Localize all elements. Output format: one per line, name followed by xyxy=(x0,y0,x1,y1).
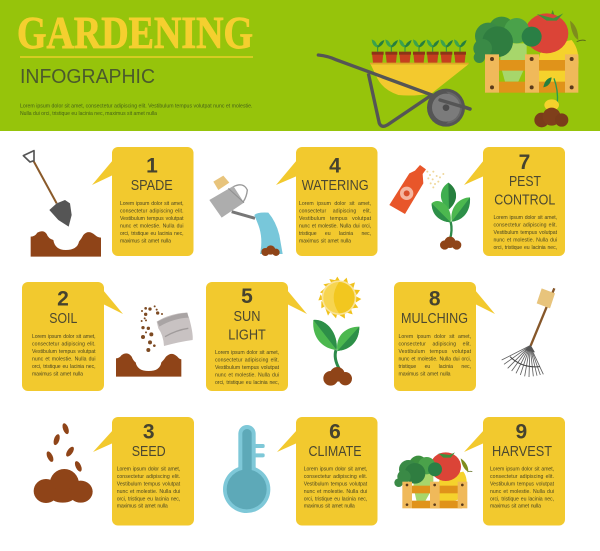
card 8: mulching: Lorem ipsum dolor sit amet, xyxy=(398,334,471,340)
card 2: soil xyxy=(22,282,123,391)
card 9: harvest: orci, tristique eu lacinia nec, xyxy=(490,496,554,502)
card 4: watering: Lorem ipsum dolor sit amet, xyxy=(299,201,371,207)
card 4: watering: Vestibulum tempus volutpat xyxy=(299,216,372,222)
card 2: soil: Lorem ipsum dolor sit amet, xyxy=(32,334,96,340)
card 3: seed: Lorem ipsum dolor sit amet, xyxy=(117,466,180,472)
card 6: climate: Lorem ipsum dolor sit amet, xyxy=(304,466,367,472)
card 9: harvest: nunc et molestie. Nulla dui xyxy=(490,489,554,495)
title: GARDENING xyxy=(17,8,253,58)
card 9: harvest: maximus sit amet nulla xyxy=(490,504,541,510)
card 9: harvest: 9 xyxy=(515,420,527,444)
card 8: mulching: tristique eu lacinia nec, xyxy=(398,364,471,370)
icon: seedling under sun xyxy=(313,320,359,386)
card 1: spade: 1 xyxy=(146,154,158,178)
card 7: pest control: PEST xyxy=(509,174,541,190)
card 7: pest control: Vestibulum tempus volutpat xyxy=(494,230,558,236)
intro text: Nulla dui orci, tristique eu lacinia nec, maximus sit amet nulla xyxy=(20,111,158,117)
card 9: harvest xyxy=(464,417,565,526)
icon: harvest crate xyxy=(394,452,472,508)
card 9: harvest: HARVEST xyxy=(492,444,552,460)
card 8: mulching: maximus sit amet nulla xyxy=(398,372,451,378)
icon: soil mound with hole xyxy=(116,353,181,377)
card 5: sun light: orci, tristique eu lacinia nec, xyxy=(215,380,279,386)
card 4: watering: 4 xyxy=(329,154,341,178)
icon: wheelbarrow with seedlings xyxy=(318,39,470,127)
icon: seeds falling on soil xyxy=(34,422,93,503)
card 3: seed: nunc et molestie. Nulla dui xyxy=(117,489,180,495)
card 4: watering: consectetur adipiscing elit. xyxy=(299,208,371,214)
card 2: soil: 2 xyxy=(57,288,69,310)
card 1: spade: SPADE xyxy=(131,178,173,194)
card 8: mulching: MULCHING xyxy=(401,311,468,327)
icon: watering can xyxy=(209,176,283,256)
icon: soil bag pouring xyxy=(141,305,193,352)
card 7: pest control: 7 xyxy=(519,151,530,174)
card 2: soil: SOIL xyxy=(49,311,77,327)
card 2: soil: maximus sit amet nulla xyxy=(32,372,83,378)
icon: spade xyxy=(23,151,72,227)
card 2: soil: Vestibulum tempus volutpat xyxy=(32,349,96,355)
card 1: spade: nunc et molestie. Nulla dui xyxy=(120,224,184,230)
card 8: mulching: Vestibulum tempus volutpat xyxy=(398,349,472,355)
card 3: seed: consectetur adipiscing elit. xyxy=(117,474,180,480)
card 4: watering: WATERING xyxy=(302,178,369,194)
icon: thermometer xyxy=(223,425,270,513)
card 6: climate: CLIMATE xyxy=(308,444,362,460)
icon: soil with hole xyxy=(31,231,101,257)
card 2: soil: consectetur adipiscing elit. xyxy=(32,342,96,348)
icon: seedling with soil xyxy=(432,183,470,250)
card 3: seed: maximus sit amet nulla xyxy=(117,504,168,510)
card 1: spade: Lorem ipsum dolor sit amet, xyxy=(120,201,184,207)
card 3: seed xyxy=(93,417,194,526)
card 5: sun light: Lorem ipsum dolor sit amet, xyxy=(215,350,279,356)
card 3: seed: orci, tristique eu lacinia nec, xyxy=(117,496,180,502)
card 5: sun light: Vestibulum tempus volutpat xyxy=(215,365,280,371)
card 3: seed: 3 xyxy=(143,420,155,444)
icon: vegetable crate in header xyxy=(473,10,586,93)
card 3: seed: SEED xyxy=(132,444,166,460)
card 9: harvest: Lorem ipsum dolor sit amet, xyxy=(490,466,554,472)
card 6: climate: Vestibulum tempus volutpat xyxy=(304,482,368,488)
card 2: soil: orci, tristique eu lacinia nec, xyxy=(32,364,96,370)
card 6: climate: 6 xyxy=(329,420,341,444)
header band xyxy=(0,0,600,131)
icon: spray bottle xyxy=(389,165,444,214)
card 6: climate xyxy=(277,417,378,526)
card 5: sun light: SUN xyxy=(234,309,260,325)
card 6: climate: nunc et molestie. Nulla dui xyxy=(304,489,367,495)
card 4: watering: tristique eu lacinia nec, xyxy=(299,231,371,237)
card 3: seed: Vestibulum tempus volutpat xyxy=(117,482,181,488)
card 6: climate: orci, tristique eu lacinia nec, xyxy=(304,496,367,502)
icon: sun xyxy=(318,277,361,319)
seedlings row xyxy=(372,39,467,63)
intro text: Lorem ipsum dolor sit amet, consectetur adipiscing elit. Vestibulum tempus volutpat nunc et molestie. xyxy=(20,104,253,110)
card 7: pest control xyxy=(464,147,565,256)
card 5: sun light: LIGHT xyxy=(228,328,266,344)
card 1: spade: consectetur adipiscing elit. xyxy=(120,208,184,214)
card 5: sun light: 5 xyxy=(241,285,253,308)
card 7: pest control: orci, tristique eu lacinia nec, xyxy=(494,245,557,251)
card 8: mulching xyxy=(394,282,495,391)
card 4: watering xyxy=(276,147,378,256)
card 7: pest control: Lorem ipsum dolor sit amet, xyxy=(494,215,557,221)
card 5: sun light: consectetur adipiscing elit. xyxy=(215,358,279,364)
card 9: harvest: Vestibulum tempus volutpat xyxy=(490,482,555,488)
card 9: harvest: consectetur adipiscing elit. xyxy=(490,474,554,480)
card 6: climate: consectetur adipiscing elit. xyxy=(304,474,367,480)
card 1: spade xyxy=(92,147,194,256)
card 6: climate: maximus sit amet nulla xyxy=(304,504,355,510)
card 7: pest control: consectetur adipiscing elit. xyxy=(494,222,557,228)
subtitle: INFOGRAPHIC xyxy=(20,66,155,88)
card 8: mulching: 8 xyxy=(429,288,441,310)
card 1: spade: maximus sit amet nulla xyxy=(120,238,171,244)
card 5: sun light xyxy=(206,282,307,391)
icon: sprouting seed in header xyxy=(534,77,568,127)
card 8: mulching: nunc et molestie. Nulla dui orci, xyxy=(398,356,471,362)
card 7: pest control: CONTROL xyxy=(494,192,555,208)
card 2: soil: nunc et molestie. Nulla dui xyxy=(32,356,96,362)
icon: rake xyxy=(502,288,555,377)
card 1: spade: orci, tristique eu lacinia nec, xyxy=(120,231,184,237)
card 4: watering: nunc et molestie. Nulla dui orci, xyxy=(299,224,371,230)
intro text xyxy=(20,104,253,117)
card 7: pest control: nunc et molestie. Nulla dui xyxy=(494,238,557,244)
card 4: watering: maximus sit amet nulla xyxy=(299,238,351,244)
card 5: sun light: nunc et molestie. Nulla dui xyxy=(215,372,279,378)
card 1: spade: Vestibulum tempus volutpat xyxy=(120,216,184,222)
card 8: mulching: consectetur adipiscing elit. xyxy=(398,342,471,348)
